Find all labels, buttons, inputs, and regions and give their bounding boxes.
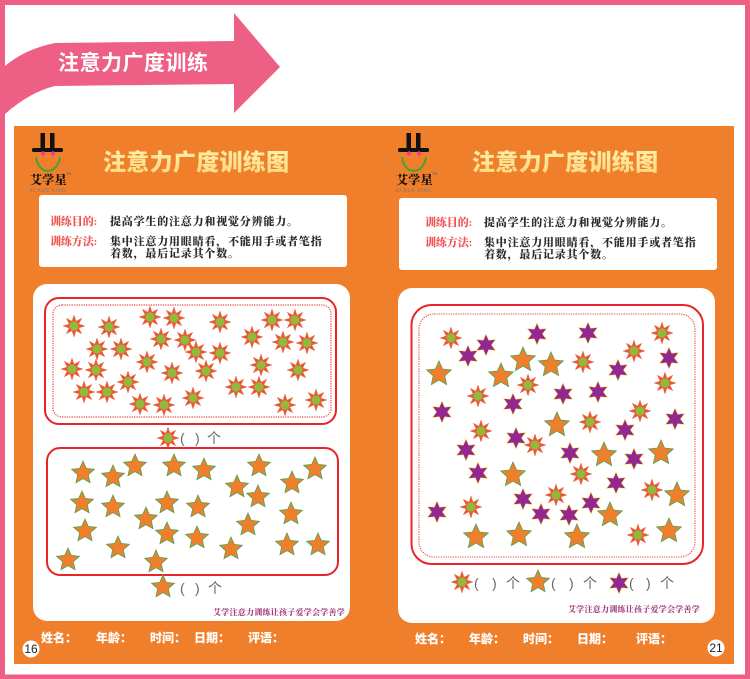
panel: right white exercise sheet [398, 288, 715, 623]
right count prompts: ) [646, 575, 651, 591]
left footer fields: 姓名： [41, 630, 77, 645]
panel: right instructions: 集中注意力用眼睛看，不能用手或者笔指 [484, 235, 696, 249]
right footer fields: 评语： [636, 631, 672, 646]
right count prompts: 个 [660, 575, 674, 591]
panel: left instructions: 训练方法: [50, 234, 97, 248]
right count prompts: ) [492, 575, 497, 591]
panel: right instructions: 提高学生的注意力和视觉分辨能力。 [484, 215, 673, 229]
right count prompts: ( [474, 575, 479, 591]
left top count prompt: ( [180, 430, 185, 446]
left top count prompt: 个 [207, 430, 221, 446]
left tagline: 艾学注意力训练让孩子爱学会学善学 [213, 607, 345, 617]
panel: left worksheet header [29, 133, 289, 194]
right footer fields: 姓名： [415, 631, 451, 646]
icon: right logo [395, 133, 437, 194]
purple stars [427, 322, 685, 526]
panel: left instructions: 提高学生的注意力和视觉分辨能力。 [110, 214, 299, 228]
left footer fields: 评语： [248, 630, 284, 645]
section heading arrow [5, 13, 280, 114]
left top count prompt: ) [195, 430, 200, 446]
panel: left instructions [39, 195, 347, 267]
left bottom count prompt: ) [195, 580, 200, 596]
right footer fields [415, 631, 672, 646]
sun stars [440, 322, 676, 546]
panel: left bottom star box [47, 448, 338, 575]
panel: right instructions [399, 198, 717, 270]
right footer fields: 时间： [523, 631, 559, 646]
left bottom count prompt: ( [180, 580, 185, 596]
panel: right instructions: 训练目的: [425, 215, 472, 229]
panel: right mixed star box [412, 305, 703, 564]
left bottom count prompt [152, 575, 222, 597]
right count prompts: 个 [506, 575, 520, 591]
panel: right instructions: 着数，最后记录其个数。 [484, 247, 614, 261]
icon: left logo [29, 133, 71, 194]
orange stars [427, 347, 689, 548]
left footer fields: 年龄： [96, 630, 132, 645]
left top count prompt [157, 427, 221, 449]
panel: left instructions: 集中注意力用眼睛看，不能用手或者笔指 [110, 234, 322, 248]
panel: left white exercise sheet [33, 284, 350, 621]
left worksheet title: 注意力广度训练图 [103, 149, 289, 175]
left footer fields: 日期： [194, 630, 230, 645]
right footer fields: 日期： [577, 631, 613, 646]
section heading arrow: 注意力广度训练 [58, 51, 208, 75]
right count prompts: ) [569, 575, 574, 591]
right page number [708, 640, 724, 656]
right worksheet title: 注意力广度训练图 [472, 149, 658, 175]
right page number: 21 [709, 641, 723, 655]
right footer fields: 年龄： [469, 631, 505, 646]
panel: left instructions: 着数，最后记录其个数。 [110, 246, 240, 260]
right count prompts: ( [629, 575, 634, 591]
right count prompts: ( [551, 575, 556, 591]
left footer fields: 时间： [150, 630, 186, 645]
right count prompts [451, 570, 674, 594]
panel: right worksheet header [395, 133, 658, 194]
left footer fields [41, 630, 284, 645]
panel: left instructions: 训练目的: [50, 214, 97, 228]
left page number [22, 640, 40, 658]
panel: right instructions: 训练方法: [425, 235, 472, 249]
panel: orange worksheet background [14, 126, 734, 664]
right count prompts: 个 [583, 575, 597, 591]
left bottom count prompt: 个 [208, 580, 222, 596]
panel: left top star box [45, 298, 336, 424]
right tagline: 艾学注意力训练让孩子爱学会学善学 [568, 604, 700, 614]
left page number: 16 [24, 642, 38, 656]
